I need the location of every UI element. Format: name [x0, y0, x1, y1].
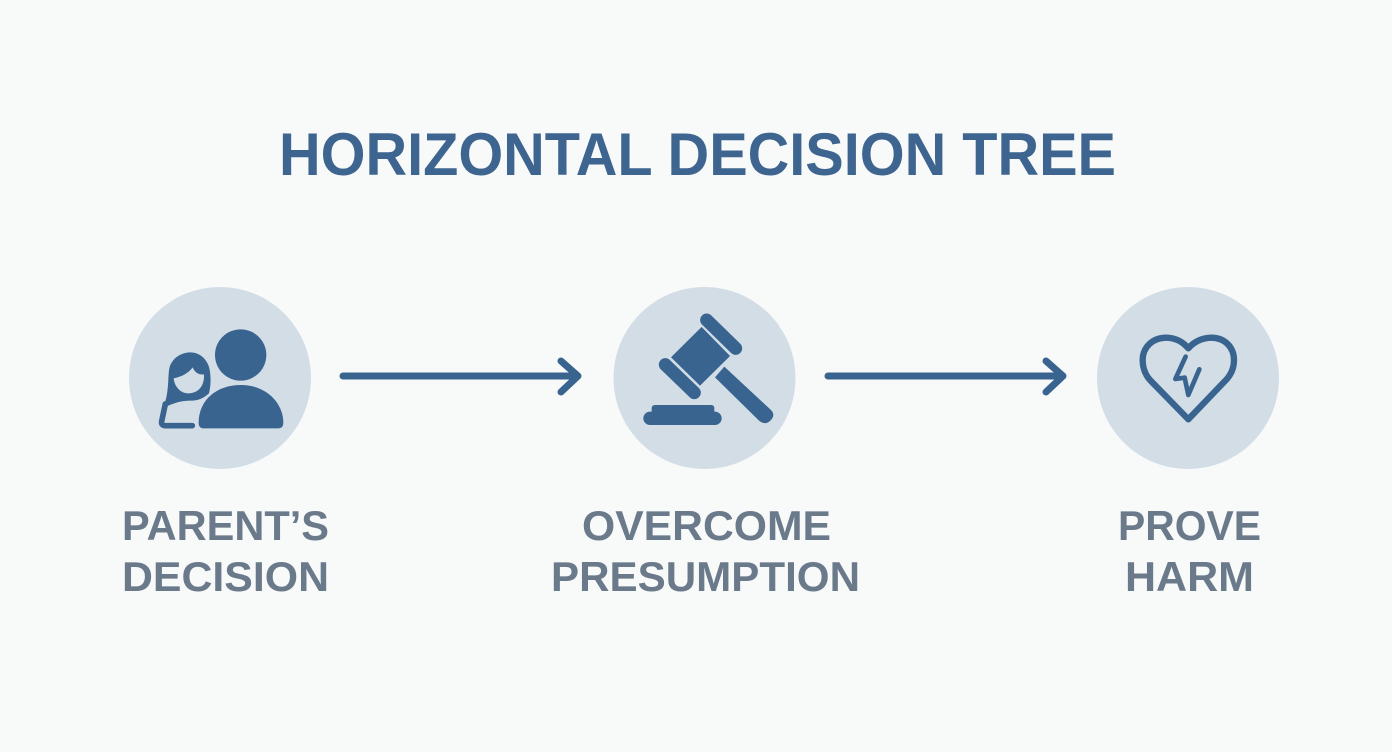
icon circle: heart	[1097, 287, 1279, 469]
label: parent's decision: PARENT’S	[122, 502, 329, 549]
arrow: step 2 to step 3	[828, 361, 1063, 392]
step 3: prove harm	[1097, 287, 1279, 600]
label: parent's decision: DECISION	[122, 553, 329, 600]
arrow: step 1 to step 2	[343, 361, 578, 392]
icon: parent and child figures	[162, 329, 283, 428]
icon circle: gavel	[614, 287, 796, 469]
label: overcome presumption	[551, 502, 860, 600]
title: HORIZONTAL DECISION TREE	[279, 121, 1116, 188]
label: prove harm: PROVE	[1118, 502, 1261, 549]
icon: gavel	[643, 320, 773, 425]
label: overcome presumption: OVERCOME	[582, 502, 831, 549]
label: parent's decision	[122, 502, 329, 600]
label: overcome presumption: PRESUMPTION	[551, 553, 860, 600]
icon circle: parent and child	[129, 287, 311, 469]
icon: heart with lightning bolt	[1143, 338, 1234, 419]
label: prove harm: HARM	[1125, 553, 1254, 600]
step 1: parent's decision	[122, 287, 329, 600]
label: prove harm	[1118, 502, 1261, 600]
step 2: overcome presumption	[551, 287, 860, 600]
